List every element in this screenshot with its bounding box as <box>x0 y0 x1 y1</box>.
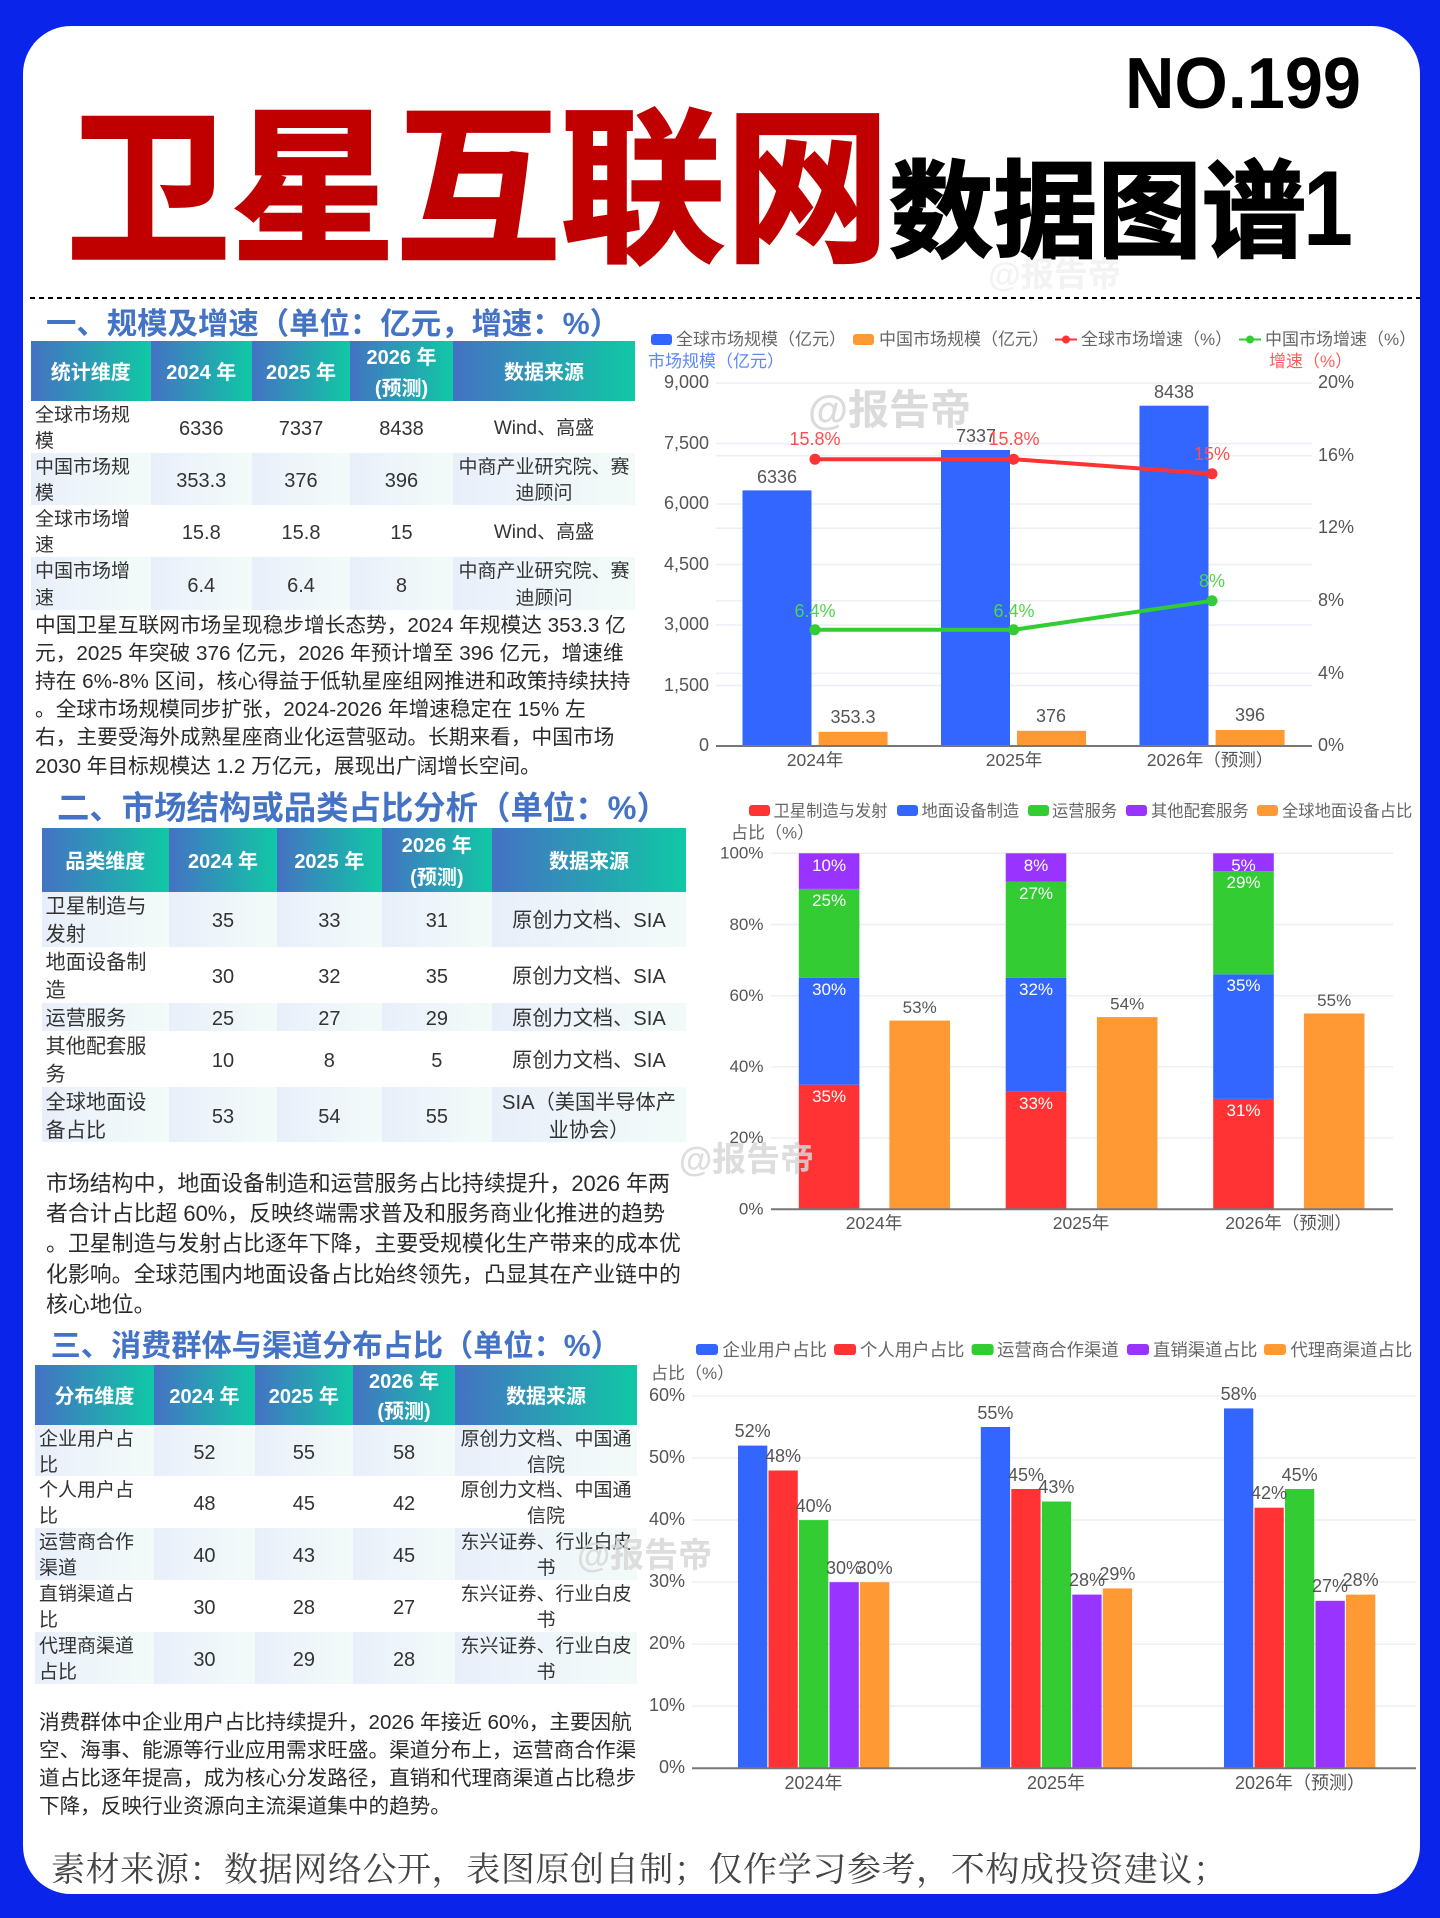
table: section 2: 全球地面设 <box>46 1092 146 1114</box>
x axis labels: 2026年（预测） <box>1147 750 1273 770</box>
x axis labels: 2025年 <box>1053 1213 1109 1233</box>
grouped bars: 2025: 28% <box>1069 1570 1105 1590</box>
table: section 1: 2024 年 <box>166 362 236 384</box>
bar value labels: 6336 <box>757 467 797 487</box>
table: section 1: 速 <box>35 588 54 609</box>
table: section 3 <box>35 1365 637 1684</box>
table: section 2: 卫星制造与 <box>46 896 146 918</box>
table: section 2: 造 <box>46 980 66 1002</box>
axis title: 占比（%） <box>731 824 814 842</box>
table: section 3: 个人用户占 <box>39 1480 134 1501</box>
stacked bar: 2025: 8% <box>1024 856 1048 875</box>
line: global growth <box>789 429 1230 479</box>
stacked bar: 2024: 30% <box>812 980 846 999</box>
table: section 2: 原创力文档、SIA <box>512 910 666 932</box>
bars: global ground equipment share: 55% <box>1317 991 1351 1010</box>
grouped bars: 2025 <box>977 1403 1135 1768</box>
x axis labels: 2024年 <box>787 750 843 770</box>
x axis labels: 2026年（预测） <box>1225 1213 1352 1233</box>
table: section 2: 35 <box>426 966 448 988</box>
text block: section 1 analysis: 。全球市场规模同步扩张，2024-2026 年增速稳定在 15% 左 <box>35 698 586 721</box>
stacked bar: 2025 <box>1006 853 1066 1209</box>
table: section 2: 8 <box>324 1050 335 1072</box>
table: section 2 <box>42 828 686 1142</box>
table: section 1: 6.4 <box>187 575 215 597</box>
grouped bars: 2024: 48% <box>765 1446 801 1466</box>
bar value labels: 7337 <box>956 426 996 446</box>
table: section 2: 25 <box>212 1008 234 1030</box>
table: section 3: 信院 <box>527 1455 565 1476</box>
left axis labels <box>664 372 709 755</box>
table: section 1: (预测) <box>375 378 428 400</box>
watermark: table 3: @报告帝 <box>577 1537 712 1575</box>
bars: global ground equipment share <box>889 991 1364 1209</box>
chart: consumer and channel grouped bars <box>649 1340 1416 1793</box>
y axis labels: 20% <box>729 1128 764 1147</box>
table: section 2: (预测) <box>410 867 463 889</box>
legend: 全球地面设备占比 <box>1282 802 1412 820</box>
table: section 2: 务 <box>46 1064 66 1086</box>
table: section 3: 28 <box>393 1649 415 1671</box>
heading: section 3: 三、消费群体与渠道分布占比（单位：%） <box>51 1330 621 1363</box>
table: section 3: 2026 年 <box>369 1371 439 1393</box>
text block: section 1 analysis: 元，2025 年突破 376 亿元，2026 年预计增至 396 亿元，增速维 <box>35 642 624 665</box>
table: section 2: 发射 <box>46 924 86 946</box>
table: section 3: 东兴证券、行业白皮 <box>461 1532 632 1553</box>
table: section 1: 中国市场增 <box>35 561 130 582</box>
table: section 3: 29 <box>293 1649 315 1671</box>
table: section 1: Wind、高盛 <box>494 418 594 439</box>
grouped bars: 2026: 27% <box>1312 1576 1348 1596</box>
table: section 1: 中商产业研究院、赛 <box>458 457 629 478</box>
y axis labels <box>720 844 764 1218</box>
table: section 1: 速 <box>35 535 54 556</box>
x axis labels: 2024年 <box>784 1773 843 1793</box>
legend: 中国市场规模（亿元） <box>879 330 1049 349</box>
stacked bar: 2024: 35% <box>812 1087 846 1106</box>
legend: 代理商渠道占比 <box>1290 1340 1412 1360</box>
bars: global ground equipment share: 54% <box>1110 994 1144 1014</box>
table: section 1: Wind、高盛 <box>494 522 594 543</box>
line: China growth <box>794 571 1225 635</box>
table: section 1: 353.3 <box>176 470 226 492</box>
heading: section 1: 一、规模及增速（单位：亿元，增速：%） <box>46 307 620 341</box>
bar value labels: 376 <box>1036 706 1066 726</box>
table: section 1: 2026 年 <box>366 347 437 369</box>
table: section 1: 全球市场规 <box>35 405 130 426</box>
table: section 1: 迪顾问 <box>515 483 572 504</box>
text block: section 3 analysis: 消费群体中企业用户占比持续提升，2026 年接近 60%，主要因航 <box>39 1710 632 1734</box>
left axis labels: 3,000 <box>664 614 709 634</box>
grouped bars: 2026: 28% <box>1343 1570 1379 1590</box>
table: section 2: 原创力文档、SIA <box>512 966 666 988</box>
y axis labels: 60% <box>649 1385 685 1405</box>
axis title: 占比（%） <box>651 1364 734 1383</box>
table: section 2: 35 <box>212 910 234 932</box>
text block: section 1 analysis: 右，主要受海外成熟星座商业化运营驱动。长期来看，中国市场 <box>35 726 614 749</box>
text block: section 3 analysis <box>39 1710 636 1818</box>
text block: section 2 analysis <box>46 1171 681 1317</box>
table: section 2: 品类维度 <box>65 851 145 873</box>
table: section 3: 企业用户占 <box>39 1429 134 1450</box>
table: section 3: 分布维度 <box>54 1386 134 1408</box>
table: section 1: 8 <box>396 575 407 597</box>
table: section 2: 55 <box>426 1106 448 1128</box>
x axis labels: 2025年 <box>1027 1773 1085 1793</box>
table: section 3: 45 <box>393 1545 415 1567</box>
grouped bars: 2024: 40% <box>796 1496 832 1516</box>
stacked bar: 2025: 32% <box>1019 980 1053 999</box>
table: section 1: 15.8 <box>282 522 320 544</box>
table: section 3: 52 <box>193 1442 216 1464</box>
table: section 1: 15.8 <box>182 522 221 544</box>
table: section 3: (预测) <box>377 1401 431 1423</box>
grouped bars: 2025: 45% <box>1008 1465 1044 1485</box>
y axis labels: 20% <box>649 1633 685 1653</box>
axis titles: 增速（%） <box>1269 352 1352 371</box>
legend: 其他配套服务 <box>1151 802 1249 820</box>
y axis labels: 60% <box>729 986 764 1005</box>
table: section 3: 原创力文档、中国通 <box>461 1429 632 1450</box>
line: global growth: 15.8% <box>789 429 841 449</box>
line: global growth: 15% <box>1194 444 1230 464</box>
stacked bar: 2025: 27% <box>1019 884 1053 903</box>
line: China growth: 6.4% <box>794 601 836 621</box>
table: section 2: 业协会） <box>549 1120 629 1142</box>
table: section 3: 30 <box>193 1649 216 1671</box>
y axis labels: 30% <box>649 1571 685 1591</box>
y axis labels: 40% <box>729 1057 764 1076</box>
table: section 2: 备占比 <box>46 1120 106 1142</box>
table: section 3: 27 <box>393 1597 415 1619</box>
line: China growth: 8% <box>1199 571 1225 591</box>
table: section 1: 7337 <box>279 418 323 440</box>
table: section 3: 比 <box>39 1506 58 1527</box>
table: section 2: 其他配套服 <box>46 1036 146 1058</box>
table: section 2: 2026 年 <box>402 835 472 857</box>
legend: 卫星制造与发射 <box>774 802 887 820</box>
text block: section 1 analysis: 2030 年目标规模达 1.2 万亿元，展现出广阔增长空间。 <box>35 755 541 778</box>
table: section 3: 代理商渠道 <box>39 1636 134 1657</box>
table: section 2: 原创力文档、SIA <box>512 1008 666 1030</box>
table: section 1: 2025 年 <box>266 362 336 384</box>
left axis labels: 0 <box>699 735 709 755</box>
grouped bars: 2026 <box>1221 1384 1379 1768</box>
right axis labels: 8% <box>1318 590 1344 610</box>
right axis labels: 12% <box>1318 517 1354 537</box>
table: section 3: 43 <box>293 1545 315 1567</box>
legend <box>651 330 1416 349</box>
table: section 3: 45 <box>293 1493 315 1515</box>
stacked bar: 2026: 35% <box>1226 976 1261 995</box>
axis titles: 市场规模（亿元） <box>648 352 784 371</box>
axis titles <box>648 352 1352 371</box>
text block: section 3 analysis: 空、海事、能源等行业应用需求旺盛。渠道分布上，运营商合作渠 <box>39 1739 636 1762</box>
right axis labels <box>1318 372 1354 755</box>
x axis labels: 2024年 <box>846 1213 902 1233</box>
text block: section 1 analysis: 持在 6%-8% 区间，核心得益于低轨星座组网推进和政策持续扶持 <box>35 670 630 693</box>
stacked bar: 2024 <box>799 853 859 1209</box>
table: section 1: 中商产业研究院、赛 <box>458 561 629 582</box>
right axis labels: 4% <box>1318 663 1344 683</box>
table: section 3: 渠道 <box>39 1558 77 1579</box>
table: section 1: 全球市场增 <box>35 509 130 530</box>
table: section 2: 数据来源 <box>549 851 629 873</box>
grouped bars: 2024: 30% <box>857 1558 893 1578</box>
text block: section 2 analysis: 。卫星制造与发射占比逐年下降，主要受规模化生产带来的成本优 <box>46 1231 681 1256</box>
table: section 1: 迪顾问 <box>515 588 572 609</box>
table: section 2: 2025 年 <box>294 851 364 873</box>
table: section 2: 32 <box>318 966 340 988</box>
table: section 1: 模 <box>35 431 54 452</box>
text block: section 2 analysis: 市场结构中，地面设备制造和运营服务占比持续提升，2026 年两 <box>46 1171 670 1196</box>
stacked bar: 2024: 10% <box>812 856 846 875</box>
line: China growth: 6.4% <box>993 601 1035 621</box>
y axis labels: 80% <box>729 915 764 934</box>
table: section 2: 53 <box>212 1106 234 1128</box>
text block: section 2 analysis: 化影响。全球范围内地面设备占比始终领先，凸显其在产业链中的 <box>46 1262 681 1287</box>
table: section 3: 55 <box>293 1442 315 1464</box>
text block: section 2 analysis: 核心地位。 <box>46 1292 155 1317</box>
chart: market structure stacked bars <box>720 802 1412 1233</box>
table: section 3: 书 <box>537 1610 556 1631</box>
y axis labels: 40% <box>649 1509 685 1529</box>
text block: section 2 analysis: 者合计占比超 60%，反映终端需求普及和服务商业化推进的趋势 <box>46 1201 665 1226</box>
bars: global market size <box>742 406 1208 746</box>
table: section 1: 6336 <box>179 418 224 440</box>
table: section 2: 33 <box>318 910 340 932</box>
stacked bar: 2026: 31% <box>1226 1101 1261 1120</box>
table: section 3: 28 <box>293 1597 315 1619</box>
watermark: header: @报告帝 <box>988 257 1121 294</box>
legend: 直销渠道占比 <box>1153 1340 1257 1360</box>
table: section 1: 376 <box>284 470 318 492</box>
grouped bars: 2025: 29% <box>1099 1564 1135 1584</box>
x axis labels <box>846 1213 1352 1233</box>
table: section 3: 运营商合作 <box>39 1532 134 1553</box>
table: section 2: 30 <box>212 966 234 988</box>
table: section 3: 2025 年 <box>269 1386 339 1408</box>
legend <box>749 802 1412 820</box>
left axis labels: 1,500 <box>664 675 709 695</box>
table: section 2: 27 <box>318 1008 340 1030</box>
bar value labels <box>757 382 1265 727</box>
x axis labels: 2025年 <box>986 750 1042 770</box>
y axis labels: 100% <box>720 844 764 862</box>
table: section 1: 8438 <box>379 418 424 440</box>
stacked bar: 2026 <box>1213 853 1274 1209</box>
x axis labels <box>787 750 1273 770</box>
right axis labels: 20% <box>1318 372 1354 392</box>
table: section 3: 比 <box>39 1455 58 1476</box>
table: section 2: 2024 年 <box>188 851 258 873</box>
table: section 1 <box>31 341 635 610</box>
grouped bars: 2025: 43% <box>1038 1477 1074 1497</box>
stacked bar: 2026: 5% <box>1231 856 1256 875</box>
bars: global ground equipment share: 53% <box>903 998 937 1017</box>
grouped bars: 2026: 42% <box>1251 1483 1287 1503</box>
x axis labels <box>784 1773 1365 1793</box>
stacked bar: 2025: 33% <box>1019 1094 1053 1113</box>
stacked bar: 2024: 25% <box>812 891 846 910</box>
table: section 3: 30 <box>193 1597 216 1619</box>
table: section 2: SIA（美国半导体产 <box>502 1092 676 1114</box>
watermark: chart 1: @报告帝 <box>808 387 971 433</box>
bar value labels: 353.3 <box>830 707 876 727</box>
table: section 3: 直销渠道占 <box>39 1584 134 1605</box>
table: section 1: 数据来源 <box>504 362 584 384</box>
table: section 2: 31 <box>426 910 448 932</box>
right axis labels: 0% <box>1318 735 1344 755</box>
bar value labels: 396 <box>1235 705 1265 725</box>
y axis labels: 0% <box>739 1200 764 1218</box>
table: section 3: 58 <box>393 1442 415 1464</box>
text block: section 1 analysis <box>35 614 630 778</box>
y axis labels: 50% <box>649 1447 685 1467</box>
table: section 3: 信院 <box>527 1506 565 1527</box>
table: section 1: 396 <box>385 470 418 492</box>
grouped bars: 2024: 30% <box>826 1558 862 1578</box>
table: section 2: 10 <box>212 1050 234 1072</box>
table: section 3: 原创力文档、中国通 <box>461 1480 632 1501</box>
legend: 运营商合作渠道 <box>997 1340 1119 1360</box>
table: section 3: 书 <box>537 1558 556 1579</box>
left axis labels: 7,500 <box>664 433 709 453</box>
left axis labels: 9,000 <box>664 372 709 392</box>
table: section 2: 原创力文档、SIA <box>512 1050 666 1072</box>
table: section 3: 比 <box>39 1610 58 1631</box>
text block: section 1 analysis: 中国卫星互联网市场呈现稳步增长态势，2024 年规模达 353.3 亿 <box>35 614 626 636</box>
table: section 3: 48 <box>193 1493 216 1515</box>
text block: section 3 analysis: 下降，反映行业资源向主流渠道集中的趋势。 <box>39 1795 451 1818</box>
bars: China market size <box>819 730 1285 746</box>
legend: 全球市场增速（%） <box>1081 330 1232 349</box>
table: section 1: 中国市场规 <box>35 457 130 478</box>
grouped bars: 2024: 52% <box>735 1421 771 1441</box>
table: section 3: 书 <box>537 1662 556 1683</box>
legend <box>696 1340 1412 1360</box>
table: section 3: 东兴证券、行业白皮 <box>461 1584 632 1605</box>
legend: 中国市场增速（%） <box>1265 330 1416 349</box>
table: section 1: 模 <box>35 483 54 504</box>
table: section 3: 2024 年 <box>169 1386 239 1408</box>
table: section 3: 东兴证券、行业白皮 <box>461 1636 632 1657</box>
legend: 个人用户占比 <box>860 1340 964 1360</box>
table: section 2: 54 <box>318 1106 340 1128</box>
table: section 1: 统计维度 <box>51 362 131 384</box>
table: section 3: 占比 <box>39 1662 77 1683</box>
chart: market size and growth combo <box>648 330 1416 770</box>
bar value labels: 8438 <box>1154 382 1194 402</box>
heading: section 2: 二、市场结构或品类占比分析（单位：%） <box>57 790 669 826</box>
table: section 1: 6.4 <box>287 575 315 597</box>
table: section 2: 地面设备制 <box>46 952 146 974</box>
y axis labels <box>649 1385 685 1777</box>
y axis labels: 0% <box>659 1757 685 1777</box>
table: section 2: 29 <box>426 1008 448 1030</box>
grouped bars: 2025: 55% <box>977 1403 1013 1423</box>
left axis labels: 6,000 <box>664 493 709 513</box>
right axis labels: 16% <box>1318 445 1354 465</box>
line: global growth: 15.8% <box>988 429 1040 449</box>
legend: 全球市场规模（亿元） <box>676 330 846 349</box>
table: section 1: 15 <box>390 522 413 544</box>
x axis labels: 2026年（预测） <box>1235 1773 1365 1793</box>
table: section 2: 运营服务 <box>46 1008 126 1030</box>
text block: section 3 analysis: 道占比逐年提高，成为核心分发路径，直销和代理商渠道占比稳步 <box>39 1767 636 1790</box>
stacked bar: 2026: 29% <box>1226 873 1261 892</box>
table: section 3: 42 <box>393 1493 415 1515</box>
legend: 运营服务 <box>1052 802 1117 820</box>
grouped bars: 2026: 58% <box>1221 1384 1257 1404</box>
table: section 3: 数据来源 <box>506 1386 586 1408</box>
legend: 企业用户占比 <box>722 1340 827 1360</box>
watermark: chart 2: @报告帝 <box>679 1141 814 1179</box>
y axis labels: 10% <box>649 1695 685 1715</box>
grouped bars: 2026: 45% <box>1282 1465 1318 1485</box>
table: section 2: 5 <box>431 1050 442 1072</box>
legend: 地面设备制造 <box>922 802 1019 820</box>
table: section 3: 40 <box>193 1545 216 1567</box>
left axis labels: 4,500 <box>664 554 709 574</box>
grouped bars: 2024 <box>735 1421 893 1768</box>
